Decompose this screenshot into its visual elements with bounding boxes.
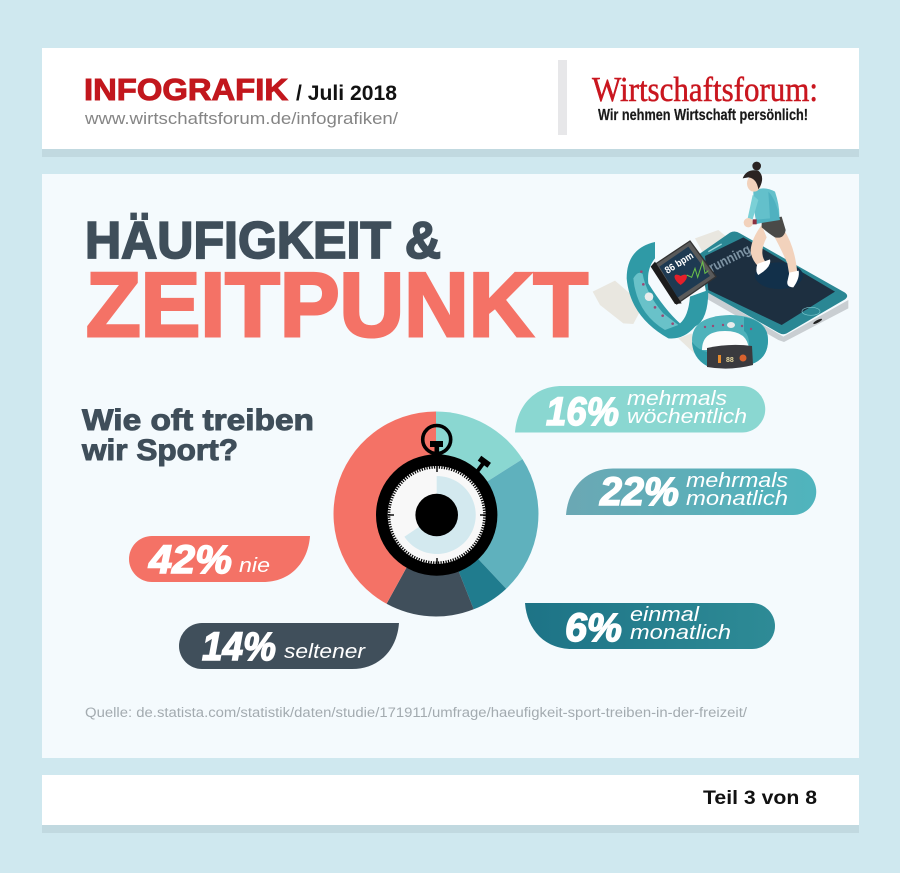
url: www.wirtschaftsforum.de/infografiken/ [84, 109, 398, 128]
slice 22% [436, 459, 538, 589]
callout: 42%: nie [239, 555, 270, 577]
source note: Quelle: de.statista.com/statistik/daten/studie/171911/umfrage/haeufigkeit-sport-treiben-in-der-freizeit/ [85, 705, 747, 720]
callout: 16% [515, 386, 765, 434]
callout: 22%: monatlich [686, 488, 788, 510]
callout: 22%: mehrmals [686, 470, 788, 492]
question heading: Wie oft treiben [82, 404, 314, 437]
callout: 6%: einmal [630, 604, 700, 626]
callout: 6%: monatlich [630, 622, 731, 644]
callout: 14%: 14% [202, 625, 276, 669]
beige shadows [593, 230, 728, 354]
question heading [81, 404, 314, 467]
panel: header [42, 48, 859, 157]
logo: Wirtschaftsforum: Wirtschaftsforum: [592, 70, 818, 109]
slice 42% [334, 412, 436, 604]
title line 2: ZEITPUNKT [86, 255, 588, 356]
callout: 6% [525, 603, 775, 650]
runner [743, 162, 799, 287]
page indicator: Teil 3 von 8 [703, 788, 817, 809]
callout: 16%: wöchentlich [627, 406, 747, 428]
callout: 16%: 16% [546, 390, 619, 434]
screen text: running [706, 241, 753, 275]
question heading: wir Sport? [81, 434, 238, 467]
divider [558, 60, 567, 135]
date: / Juli 2018 [296, 82, 397, 105]
logo tagline: Wir nehmen Wirtschaft persönlich! [598, 107, 808, 124]
heading: Infografik: INFOGRAFIK [84, 72, 289, 107]
callout: 6%: 6% [565, 606, 622, 650]
panel: main [42, 174, 859, 758]
title line 1: HÄUFIGKEIT & [85, 212, 441, 270]
watch text: 86 bpm [663, 250, 696, 277]
callout: 14%: seltener [284, 641, 367, 663]
icon: stopwatch [376, 426, 497, 576]
callout: 16%: mehrmals [627, 388, 727, 410]
illustration: fitness band [692, 315, 768, 369]
smartwatch [627, 241, 716, 339]
callout: 22% [566, 468, 816, 515]
smartphone [699, 231, 848, 342]
illustration: smartphone, smartwatch and runner [593, 162, 848, 354]
callout: 14% [179, 623, 399, 669]
slice 16% [436, 412, 522, 514]
callout: 22%: 22% [599, 470, 679, 514]
illustration: fitness band: 88 [726, 357, 734, 364]
slice 6% [436, 514, 506, 609]
donut chart [334, 412, 538, 616]
panel: footer [42, 775, 859, 833]
callout: 42% [129, 536, 310, 582]
slice 14% [387, 514, 474, 616]
callout: 42%: 42% [148, 538, 232, 582]
